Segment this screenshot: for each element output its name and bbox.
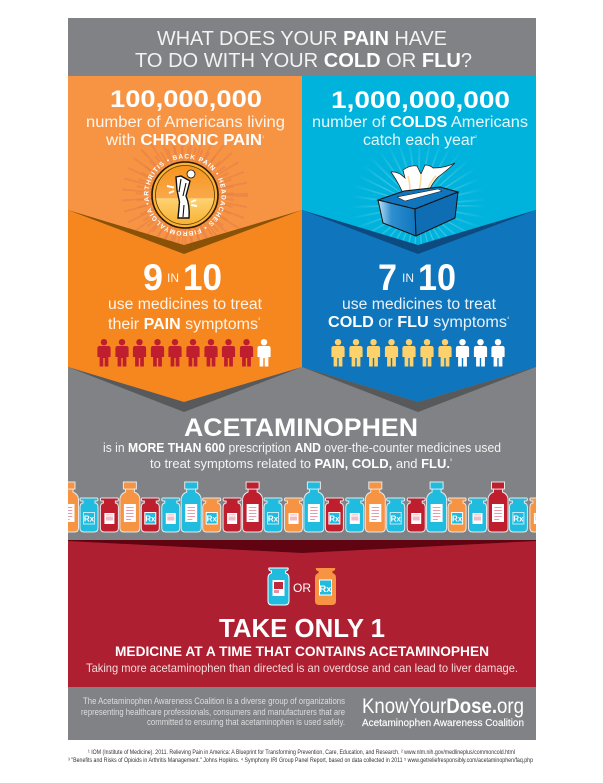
statistic: 9 in 10: IN <box>167 271 179 285</box>
footer: logo: KnowYourDose.org <box>362 695 524 718</box>
statistic: 1,000,000,000 colds: number of COLDS Americans <box>312 114 528 131</box>
heading: take only 1: TAKE ONLY 1 <box>219 615 385 643</box>
pictogram: seven of ten people <box>331 339 505 366</box>
icon: pain sunburst badge: ARTHRITIS • BACK PAIN • HEADACHES • FIBROMYALGIA • <box>144 154 226 236</box>
footer: coalition description: committed to ensuring that acetaminophen is used safely. <box>147 717 345 727</box>
statistic: 9 in 10: 3 <box>258 316 261 321</box>
icon: tissue box <box>378 163 458 245</box>
statistic: 1,000,000,000 colds: catch each year <box>363 132 475 149</box>
footer: logo <box>362 695 524 729</box>
statistic: 7 in 10: 4 <box>507 315 510 320</box>
medicine bottle row: Rx <box>513 514 524 524</box>
statistic: 9 in 10: 10 <box>183 257 222 298</box>
panel: acetaminophen text <box>103 414 501 471</box>
statistic: 1,000,000,000 colds: 1,000,000,000 <box>331 87 510 114</box>
medicine bottle row: Rx <box>391 514 401 524</box>
statistic: 7 in 10: IN <box>402 271 414 285</box>
infographic background panel <box>68 18 536 740</box>
footer: coalition description <box>81 696 345 727</box>
statistic: 7 in 10 <box>328 257 510 331</box>
statistic: 9 in 10: 9 <box>143 257 163 298</box>
statistic: 100,000,000 chronic pain: 100,000,000 <box>110 86 262 113</box>
panel: acetaminophen text: ACETAMINOPHEN <box>184 414 418 442</box>
statistic: 9 in 10 <box>108 257 263 333</box>
icon: orange bottle <box>315 568 336 605</box>
statistic: 7 in 10: 10 <box>418 257 456 298</box>
statistic: 1,000,000,000 colds <box>312 87 528 149</box>
icon: blue bottle <box>268 568 289 605</box>
medicine bottle row: Rx <box>329 514 340 524</box>
medicine bottle row: Rx <box>84 514 95 524</box>
statistic: 7 in 10: COLD or FLU symptoms <box>328 314 507 331</box>
icon: person with back pain <box>167 170 197 218</box>
statistic: 9 in 10: their PAIN symptoms <box>108 316 258 333</box>
panel: colds and flu <box>302 76 536 402</box>
chevron shadows under panels <box>68 367 536 412</box>
medicine bottle row <box>58 482 548 532</box>
statistic: 100,000,000 chronic pain: 1 <box>262 134 265 139</box>
title: TO DO WITH YOUR COLD OR FLU? <box>135 49 472 72</box>
medicine bottle row: Rx <box>452 514 463 524</box>
medicine bottle row: Rx <box>268 514 279 524</box>
panel: take only one <box>68 540 536 687</box>
warning text: Taking more acetaminophen than directed is an overdose and can lead to liver damage. <box>86 661 518 675</box>
panel: chronic pain <box>68 76 302 402</box>
statistic: 100,000,000 chronic pain <box>86 86 285 149</box>
subheading: medicine at a time: MEDICINE AT A TIME THAT CONTAINS ACETAMINOPHEN <box>115 644 489 659</box>
medicine bottle row: Rx <box>145 514 156 524</box>
panel: acetaminophen text: to treat symptoms related to PAIN, COLD, and FLU. <box>150 457 450 471</box>
icon: orange bottle: Rx <box>319 584 332 595</box>
medicine bottle row: Rx <box>207 514 217 524</box>
statistic: 1,000,000,000 colds: 2 <box>475 134 478 139</box>
footer: coalition description: representing healthcare professionals, consumers and manufacturers that are <box>81 707 345 717</box>
statistic: 7 in 10: 7 <box>378 257 397 298</box>
statistic: 100,000,000 chronic pain: number of Americans living <box>86 114 285 131</box>
title <box>135 27 472 72</box>
statistic: 7 in 10: use medicines to treat <box>342 296 497 313</box>
statistic: 100,000,000 chronic pain: with CHRONIC PAIN <box>105 132 262 149</box>
statistic: 9 in 10: use medicines to treat <box>108 296 263 313</box>
panel: acetaminophen text: is in MORE THAN 600 prescription AND over-the-counter medicines used <box>103 441 501 455</box>
pictogram: nine of ten people <box>97 339 271 366</box>
icon: pain sunburst badge <box>122 132 248 244</box>
panel: acetaminophen text: 5 <box>450 457 453 462</box>
footnotes <box>68 749 533 764</box>
title: WHAT DOES YOUR PAIN HAVE <box>157 27 447 50</box>
footer: coalition description: The Acetaminophen Awareness Coalition is a diverse group of organizations <box>83 696 345 706</box>
footer: logo: Acetaminophen Awareness Coalition <box>362 717 524 729</box>
text: or: OR <box>293 581 311 595</box>
